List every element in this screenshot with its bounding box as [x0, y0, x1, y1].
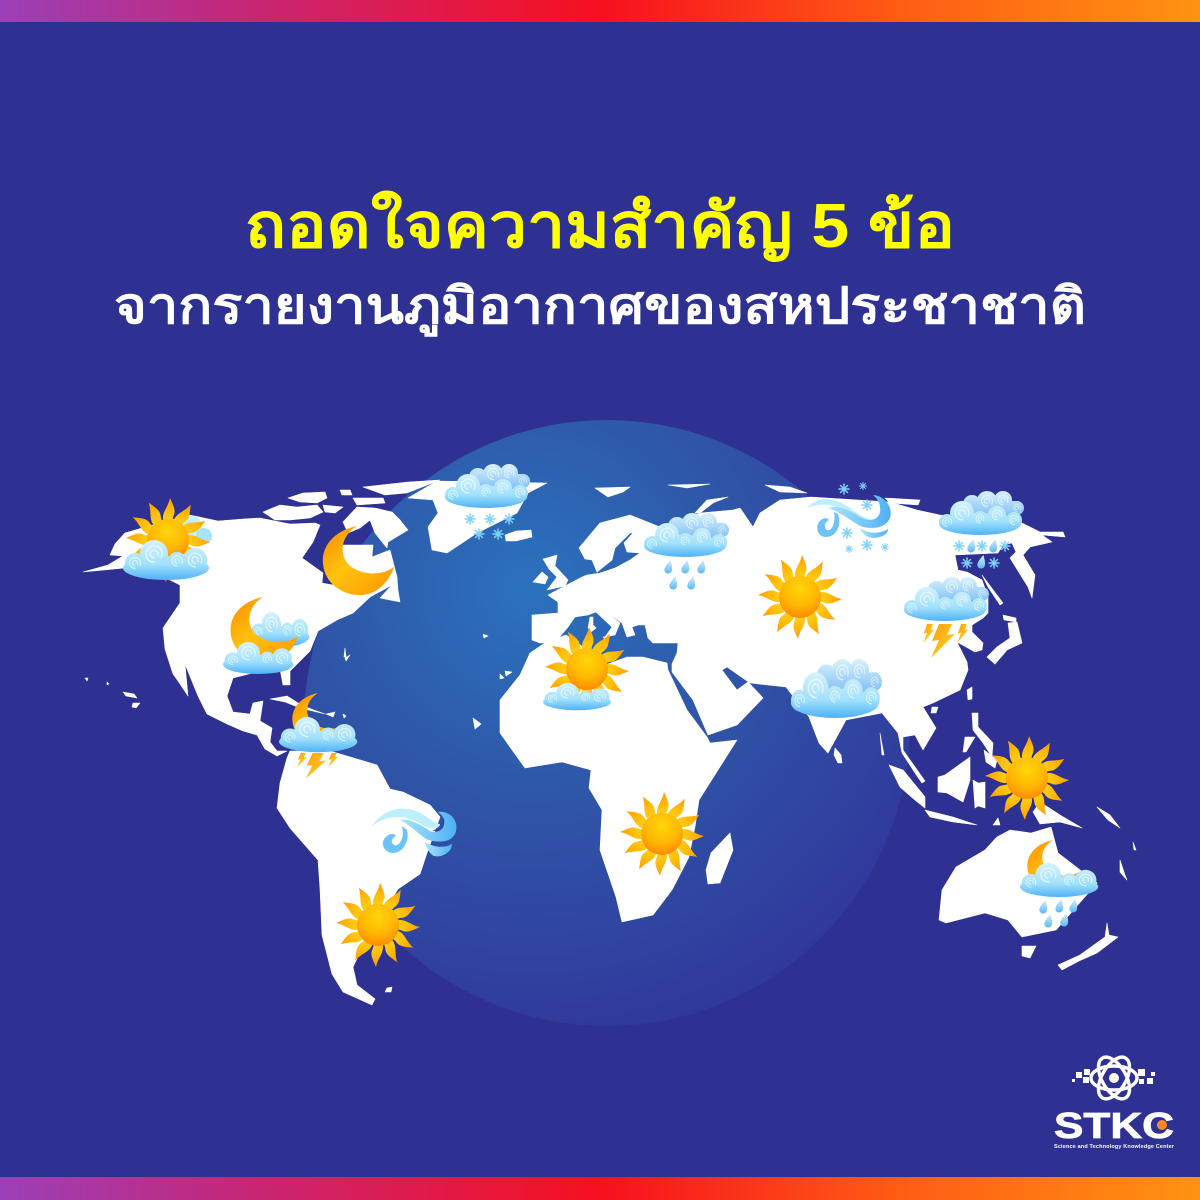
- globe circle: [304, 420, 910, 1026]
- subtitle: จากรายงานภูมิอากาศของสหประชาชาติ: [114, 278, 1086, 337]
- pacific islands: [1097, 807, 1136, 880]
- icon: moon and rain cloud, Australia: [1020, 840, 1098, 928]
- eurasia: [532, 497, 1065, 783]
- icon: sun, South America: [336, 883, 420, 967]
- icon: snow cloud, Greenland: [445, 464, 530, 539]
- south america: [277, 751, 440, 1005]
- icon: sun, Southeast Asia: [985, 736, 1069, 820]
- icon: wind, Brazil: [372, 809, 456, 856]
- icon: rain cloud, Russia: [644, 513, 729, 590]
- philippines: [963, 713, 997, 768]
- icon: snow and rain cloud, East Russia: [939, 491, 1024, 569]
- icon: storm cloud, China: [904, 577, 989, 658]
- icon: sun and cloud, Alaska: [123, 498, 212, 582]
- caribbean and pacific islands: [85, 634, 512, 992]
- top gradient bar: [0, 0, 1200, 22]
- africa: [500, 635, 737, 922]
- madagascar: [706, 833, 733, 884]
- mediterranean islands: [588, 617, 610, 640]
- logo wordmark: STKC: [1054, 1105, 1174, 1146]
- icon: moon and clouds, USA: [223, 597, 309, 674]
- world map: [83, 480, 1136, 1005]
- icon: moon, cloud and lightning, Caribbean: [279, 693, 357, 778]
- greenland: [408, 481, 547, 553]
- icon: sun, Central Asia: [758, 555, 842, 639]
- icon: sun and cloud, North Africa: [543, 627, 629, 711]
- icon: cloud, India: [791, 659, 882, 718]
- north america: [83, 515, 400, 756]
- southeast asia islands: [880, 733, 1082, 828]
- tasmania and new zealand: [1022, 923, 1118, 970]
- british isles: [533, 555, 568, 590]
- bottom gradient bar: [0, 1177, 1200, 1200]
- icon: sun, Southern Africa: [620, 792, 704, 876]
- logo side squares: [1072, 1069, 1155, 1084]
- europe arctic islands: [595, 484, 920, 513]
- logo: STKC: [1054, 1052, 1175, 1150]
- australia: [939, 827, 1097, 937]
- logo tagline: Science and Technology Knowledge Center: [1054, 1144, 1175, 1150]
- title: ถอดใจความสำคัญ 5 ข้อ: [245, 190, 955, 262]
- icon: moon, Canada: [323, 526, 394, 595]
- icon: wind and snow, Siberia: [807, 482, 891, 552]
- logo orange dot: [1157, 1120, 1167, 1130]
- logo atom icon: [1091, 1052, 1137, 1104]
- sri lanka: [834, 748, 842, 763]
- arctic canada: [263, 480, 440, 548]
- east asia islands: [931, 575, 1022, 713]
- iceland: [505, 530, 532, 541]
